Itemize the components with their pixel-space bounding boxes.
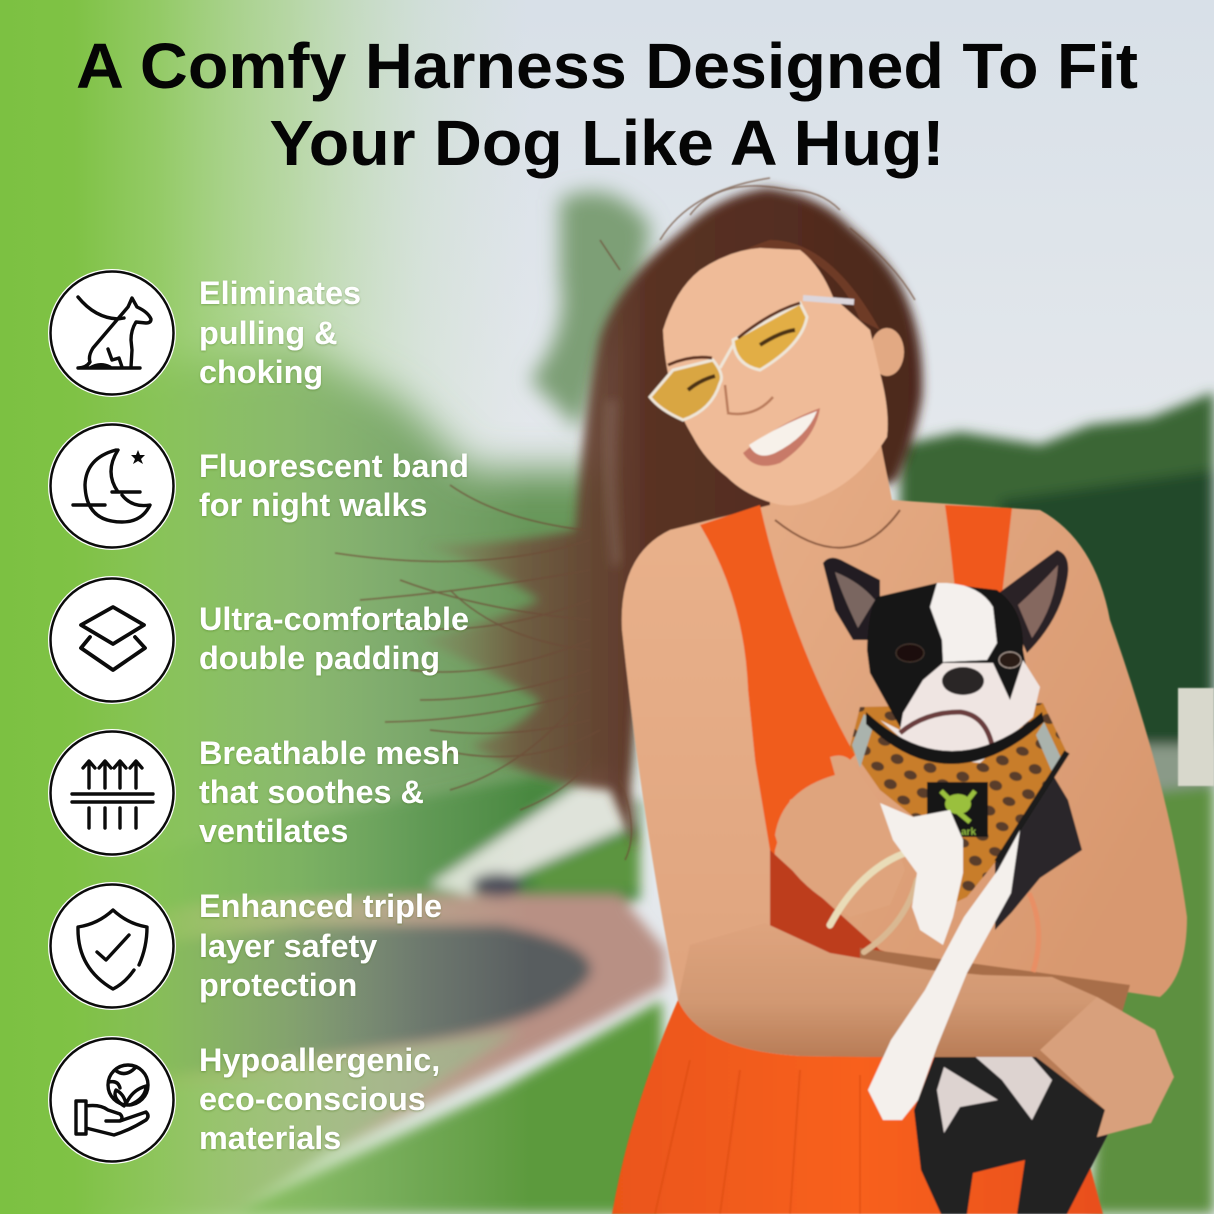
text: triple layer safety: [199, 888, 442, 1003]
text: breathable mesh: ventilates: [199, 813, 348, 849]
neck line: [775, 510, 900, 548]
text: breathable mesh: Breathable mesh: [199, 735, 460, 771]
text: fluorescent band: for night walks: [199, 487, 428, 523]
sunglasses: [650, 298, 854, 420]
brand patch: ark: [961, 827, 976, 838]
text: double padding: Ultra-comfortable: [199, 601, 469, 637]
feature: pulling: [48, 269, 361, 397]
text: eliminates pulling: choking: [199, 354, 323, 390]
skin: torso and chest: [670, 440, 1187, 997]
blurred trees: [0, 350, 620, 900]
title: A Comfy Harness Designed To Fit: [76, 30, 1138, 102]
orange dress skirt: [612, 1000, 1103, 1214]
icon: hand holding globe and leaves: [48, 1036, 176, 1164]
orange bangle: [1029, 893, 1039, 972]
text: double padding: double padding: [199, 640, 440, 676]
text: eliminates pulling: [199, 275, 361, 390]
icon: shield with check: [48, 882, 176, 1010]
dog head: [823, 550, 1068, 764]
ear: [870, 328, 904, 376]
left green gradient overlay: [0, 0, 530, 1214]
text: breathable mesh: that soothes &: [199, 774, 424, 810]
title: Your Dog Like A Hug!: [270, 107, 944, 179]
smile: [743, 408, 820, 466]
text: fluorescent band: [199, 448, 469, 523]
text: eliminates pulling: pulling &: [199, 315, 338, 351]
hair mass and windblown strands: [335, 178, 922, 860]
icon: airflow arrows: [48, 729, 176, 857]
feature: triple layer safety: [48, 882, 442, 1010]
orange dress bodice: [700, 505, 855, 925]
text: eliminates pulling: Eliminates: [199, 275, 361, 311]
text: eco materials: materials: [199, 1120, 341, 1156]
feature: fluorescent band: [48, 422, 469, 550]
text: eco materials: eco-conscious: [199, 1081, 426, 1117]
feature: breathable mesh: [48, 729, 460, 857]
background tree: [530, 192, 650, 430]
face: [663, 248, 888, 505]
icon: stacked layers: [48, 576, 176, 704]
dog dark flank: [995, 770, 1082, 930]
dog harness: [850, 703, 1067, 905]
dog front paw: [880, 803, 963, 945]
arm: viewer-left upper arm: [622, 525, 770, 1000]
brand patch: [927, 782, 988, 838]
text: double padding: [199, 601, 469, 676]
text: triple layer safety: Enhanced triple: [199, 888, 442, 924]
feature: eco materials: [48, 1036, 440, 1164]
arm shadow: [860, 948, 1130, 1020]
text: triple layer safety: protection: [199, 967, 357, 1003]
dog lower body: [914, 1040, 1125, 1214]
photo: woman holding a dog: [335, 178, 1187, 1214]
title: [76, 30, 1138, 179]
text: eco materials: Hypoallergenic,: [199, 1042, 440, 1078]
feature: double padding: [48, 576, 469, 704]
forearm and hand across: [678, 923, 1174, 1137]
icon: dog on leash: [48, 269, 176, 397]
icon: moon and star: [48, 422, 176, 550]
dog long leg: [868, 830, 1020, 1120]
text: triple layer safety: layer safety: [199, 928, 377, 964]
hand on chest: [775, 755, 905, 917]
text: fluorescent band: Fluorescent band: [199, 448, 469, 484]
text: eco materials: [199, 1042, 440, 1156]
white post: [1178, 688, 1214, 786]
nose: [725, 385, 773, 414]
text: breathable mesh: [199, 735, 460, 849]
bangles: [830, 853, 917, 952]
